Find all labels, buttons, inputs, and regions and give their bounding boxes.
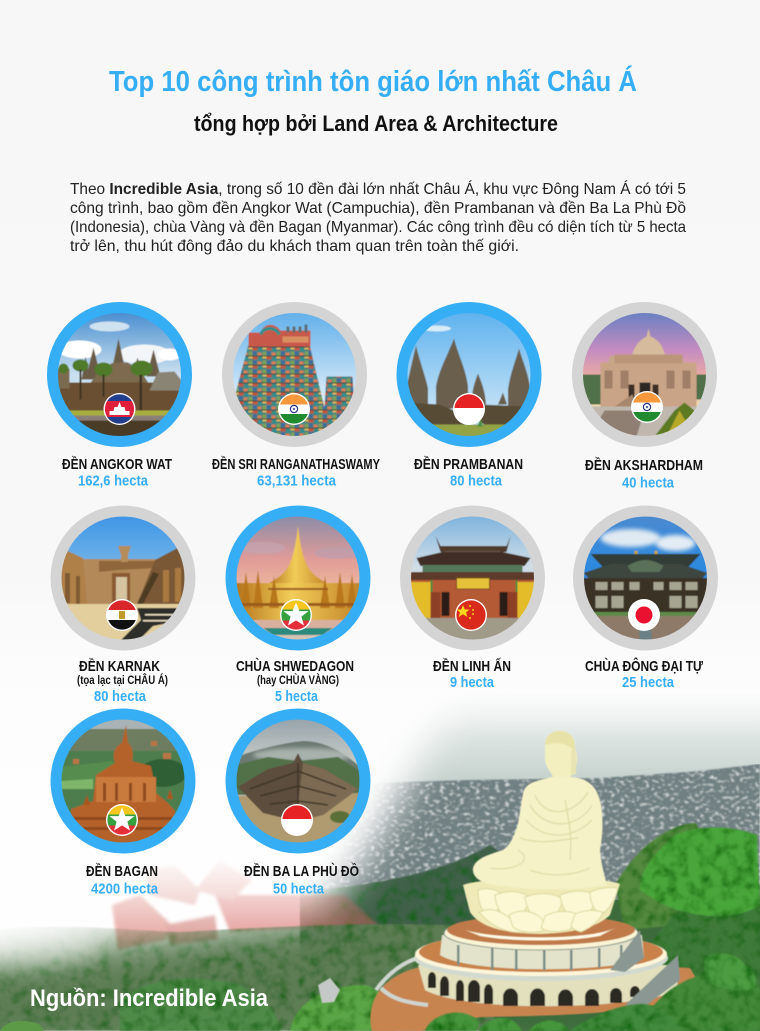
source note: Nguồn: Incredible Asia (30, 985, 269, 1012)
misty forest (0, 924, 500, 1031)
area: 80 hecta (94, 688, 147, 705)
intro paragraph: Theo Incredible Asia, trong số 10 đền đài lớn nhất Châu Á, khu vực Đông Nam Á có tới 5 (70, 179, 686, 198)
name: ĐỀN BA LA PHÙ ĐỒ (244, 862, 359, 880)
title: Top 10 công trình tôn giáo lớn nhất Châu Á (109, 64, 637, 98)
photo circle (50, 506, 196, 650)
background landscape with statue (0, 690, 760, 1031)
intro paragraph (70, 179, 686, 255)
green base on the right (480, 900, 760, 1031)
right foreground trees (640, 972, 760, 1031)
photo circle (572, 302, 717, 447)
subtitle: tổng hợp bởi Land Area & Architecture (194, 111, 558, 136)
distant town (300, 764, 760, 920)
area: 9 hecta (450, 674, 495, 691)
photo circle (396, 302, 542, 447)
flag: Indonesia (453, 393, 485, 425)
item: Bagan (50, 708, 196, 898)
flag: Egypt (106, 599, 138, 631)
area: 4200 hecta (91, 880, 159, 898)
photo circle (226, 506, 370, 650)
photo circle (400, 506, 545, 650)
item: Sri Ranganathaswamy (212, 302, 380, 490)
name: CHÙA SHWEDAGON (236, 657, 354, 675)
area: 162,6 hecta (78, 472, 149, 490)
photo circle (47, 302, 192, 447)
photo circle (226, 708, 370, 854)
photo circle (222, 302, 367, 447)
name: ĐỀN SRI RANGANATHASWAMY (212, 456, 380, 473)
flag: Myanmar (280, 599, 312, 632)
area: 25 hecta (622, 674, 675, 691)
item: Todai-ji (573, 506, 718, 691)
stairs (610, 930, 644, 972)
area: 40 hecta (622, 474, 675, 492)
note: (tọa lạc tại CHÂU Á) (77, 674, 168, 687)
flag: Japan (628, 599, 660, 631)
wisp of mist at far left (0, 925, 100, 965)
robe (473, 777, 607, 889)
flag: India (631, 391, 663, 423)
pagoda roofs (112, 860, 378, 950)
top orange ring (444, 916, 638, 950)
flag: Myanmar (106, 804, 138, 836)
lowest orange ring (370, 960, 697, 1031)
name: ĐỀN BAGAN (86, 863, 158, 880)
item: Karnak (50, 506, 196, 705)
name: ĐỀN PRAMBANAN (414, 456, 523, 473)
statue of Buddha (463, 731, 620, 940)
flag: China (455, 599, 487, 631)
name: CHÙA ĐÔNG ĐẠI TỰ (585, 657, 703, 675)
robe folds (490, 792, 592, 875)
intro paragraph: (Indonesia), chùa Vàng và đền Bagan (Myanmar). Các công trình đều có diện tích từ 5 hecta (70, 219, 686, 236)
item: Akshardham (572, 302, 717, 492)
panel tier (440, 935, 644, 969)
sky (388, 708, 760, 790)
bottom-left forest (0, 924, 500, 1031)
item: Borobudur (226, 708, 370, 898)
area: 50 hecta (273, 880, 325, 898)
photo circle (573, 506, 718, 650)
flag: India (278, 393, 310, 425)
arches tier (418, 965, 678, 1006)
name: ĐỀN LINH ẤN (433, 658, 511, 675)
statue platform (370, 915, 697, 1031)
flag: Cambodia (104, 393, 136, 425)
name: ĐỀN AKSHARDHAM (585, 457, 703, 474)
item: Angkor Wat (47, 302, 192, 490)
mid orange ring (414, 935, 668, 981)
item: Prambanan (396, 302, 542, 490)
name: ĐỀN ANGKOR WAT (62, 456, 172, 473)
area: 5 hecta (275, 688, 319, 705)
bright bushes bottom (290, 985, 396, 1031)
name: ĐỀN KARNAK (79, 658, 160, 675)
area: 63,131 hecta (257, 472, 337, 490)
intro paragraph: công trình, bao gồm đền Angkor Wat (Campuchia), đền Prambanan và đền Ba La Phù Đồ (70, 200, 686, 217)
misty sky and town (300, 708, 760, 1031)
rock (318, 978, 340, 1003)
item: Linh An (400, 506, 545, 691)
note: (hay CHÙA VÀNG) (257, 674, 339, 687)
head (545, 731, 577, 777)
lotus throne (463, 878, 620, 934)
item: Shwedagon (226, 506, 370, 705)
flag: Indonesia (281, 804, 313, 836)
photo circle (50, 708, 196, 854)
dark forest behind the statue (300, 844, 500, 949)
area: 80 hecta (450, 472, 503, 490)
hill and big trees on the right (615, 823, 700, 930)
intro paragraph: trở lên, thu hút đông đảo du khách tham quan trên toàn thế giới. (70, 238, 519, 255)
